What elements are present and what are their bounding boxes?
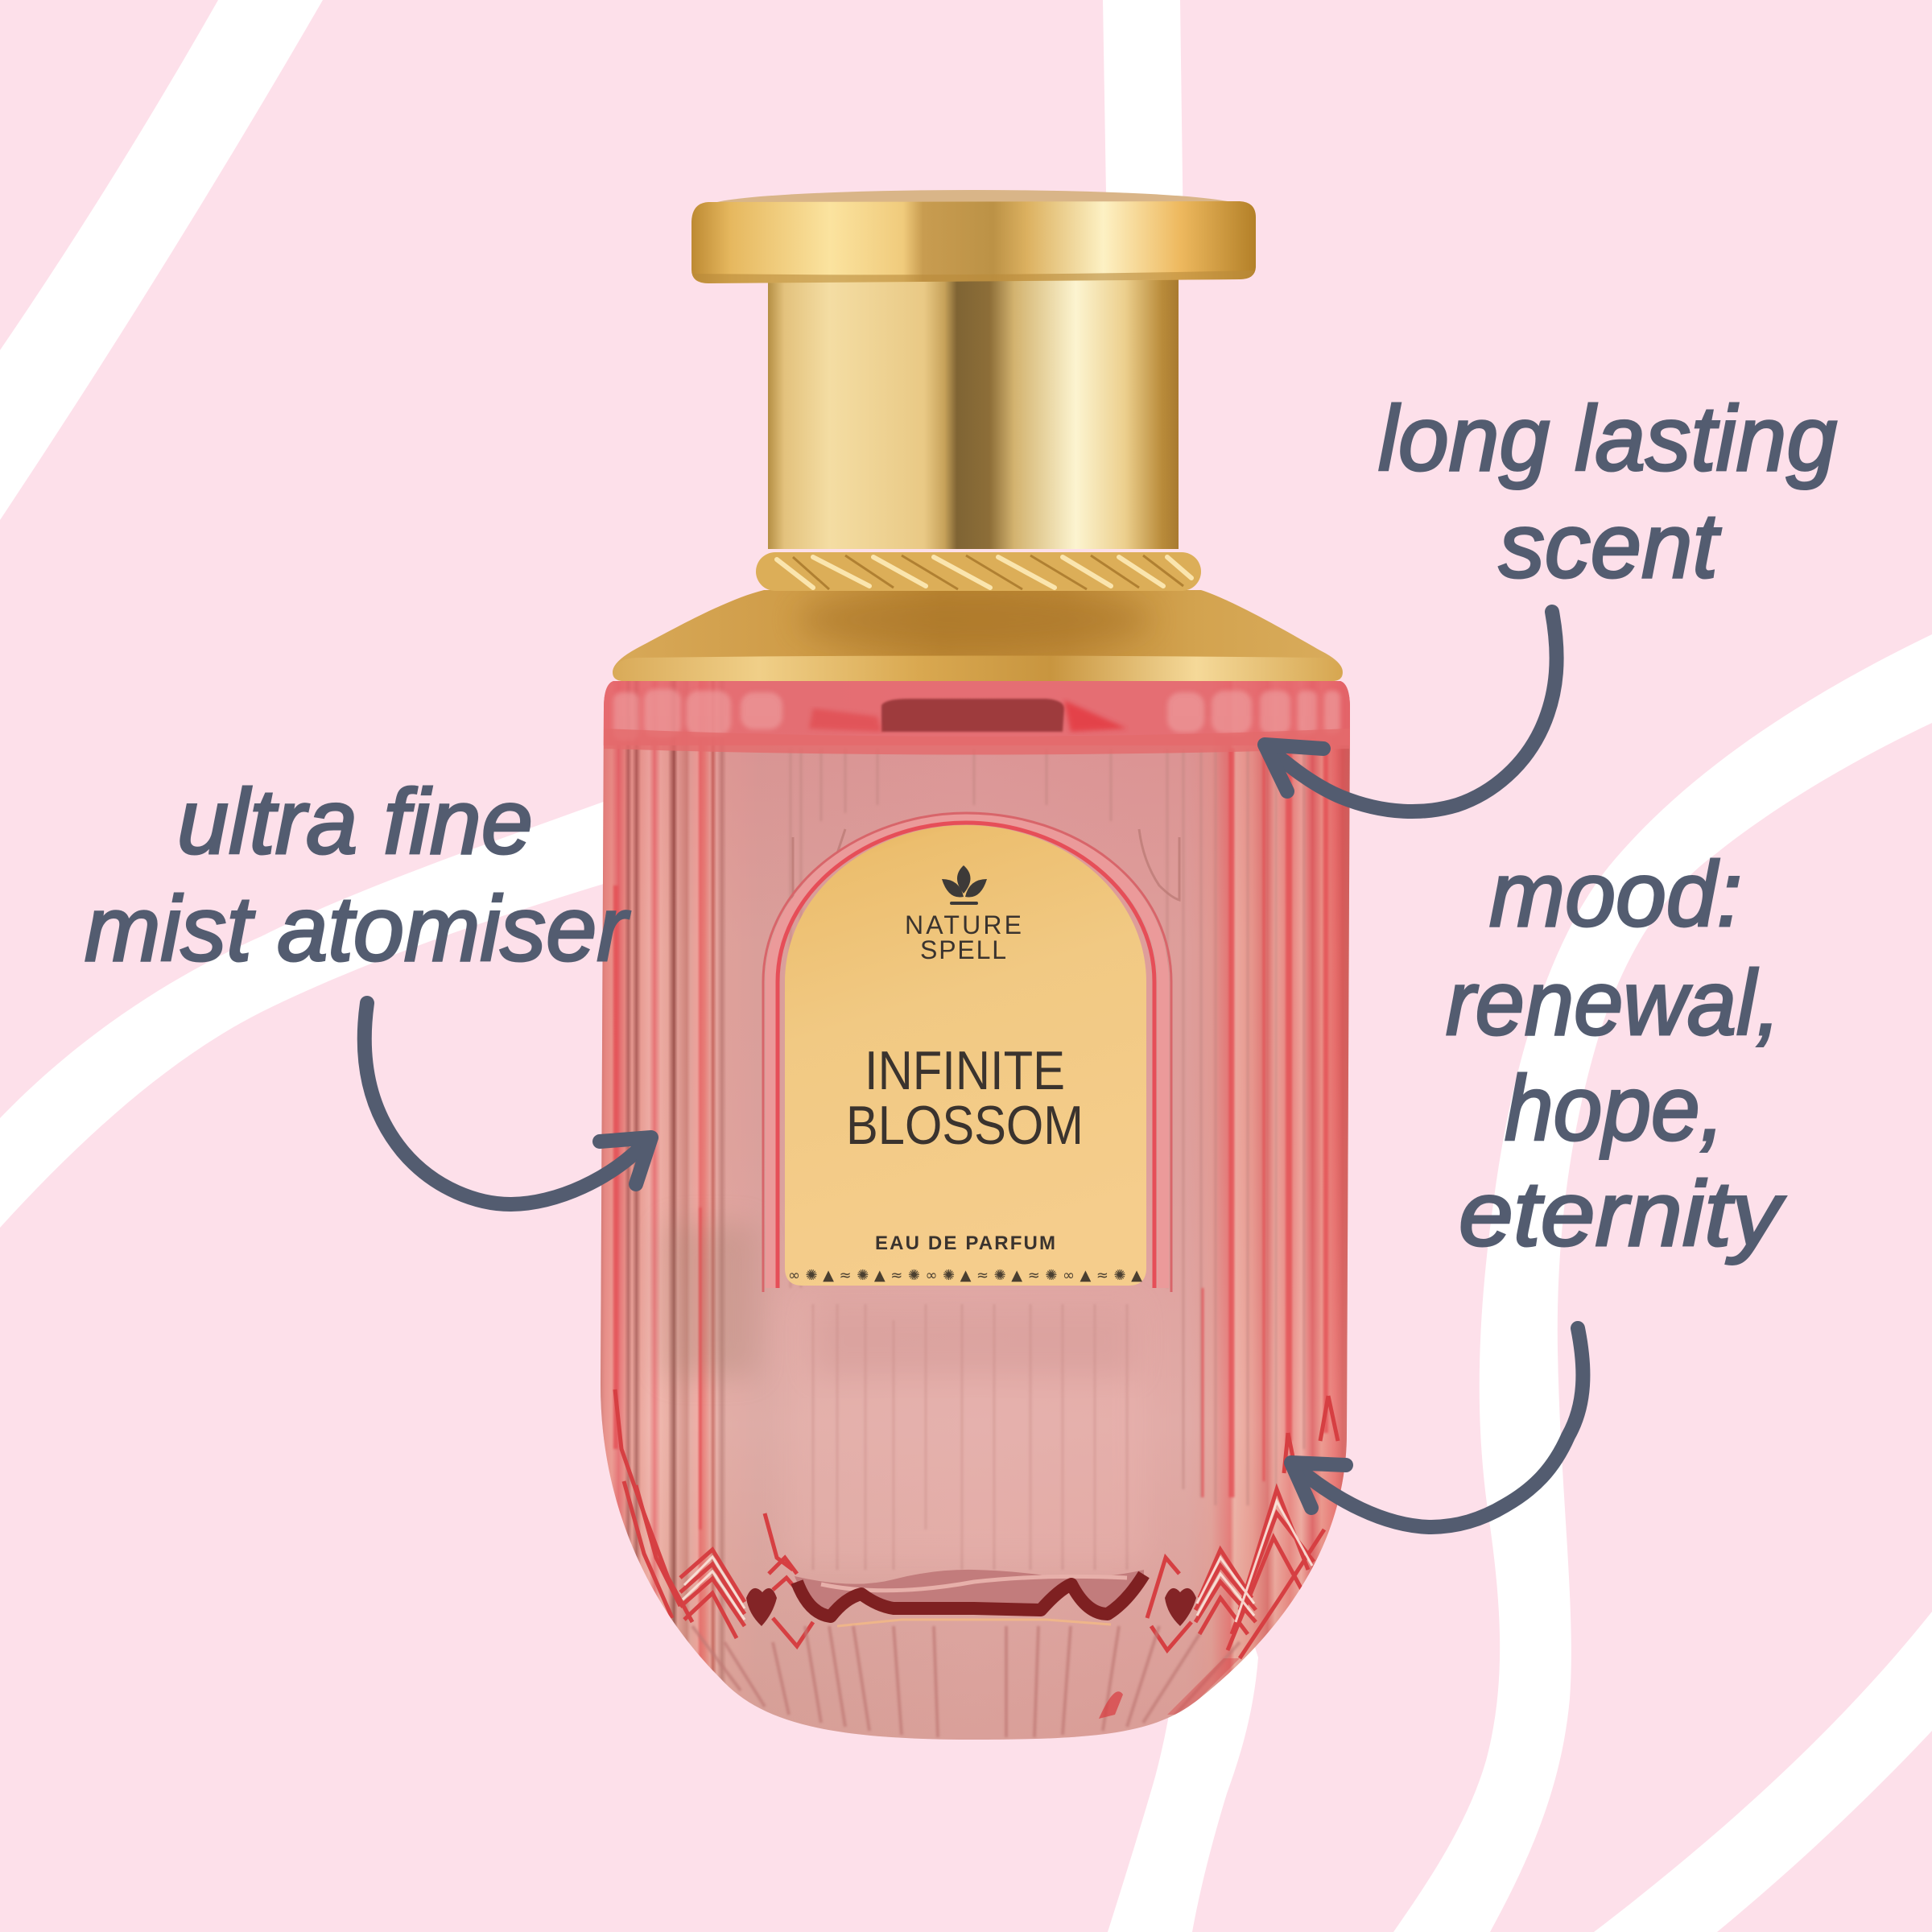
red flute highlights on the sides <box>616 749 1326 1530</box>
chevron refractions <box>615 1389 1338 1658</box>
recessed panel below label <box>811 1304 1129 1553</box>
text: ultra fine mist atomiser <box>85 771 630 980</box>
glass body <box>601 681 1350 1744</box>
perfume bottle <box>601 190 1350 1744</box>
ornament row: ∞✺▲≈✺▲≈✺∞✺▲≈✺▲≈✺∞▲≈✺▲ <box>788 1267 1142 1284</box>
arrow: to atomiser <box>365 1003 651 1204</box>
text: mood renewal hope eternity: mood: <box>1489 844 1742 946</box>
text: mood renewal hope eternity: eternity <box>1459 1163 1785 1265</box>
brand name: NATURE <box>905 910 1022 939</box>
arrow: to mood <box>1291 1328 1583 1527</box>
shoulder collar <box>613 589 1343 681</box>
text: ultra fine mist atomiser: ultra fine <box>177 771 533 873</box>
heart reflections <box>746 1588 777 1626</box>
curved grain around arch <box>793 829 1179 902</box>
icon: leaf logo <box>942 865 987 905</box>
liquid wave bottom <box>795 1570 1144 1610</box>
base fan lines <box>692 1626 1240 1737</box>
product name: INFINITE <box>865 1040 1065 1101</box>
cap <box>691 190 1256 283</box>
haze below label <box>823 1315 1123 1367</box>
neck <box>768 278 1179 549</box>
gold label: BLOSSOM <box>846 1095 1084 1156</box>
text: long lasting scent <box>1378 388 1837 597</box>
arched recess outline <box>763 813 1171 1292</box>
eau de parfum: EAU DE PARFUM <box>875 1232 1055 1254</box>
text: mood renewal hope eternity <box>1446 844 1785 1265</box>
arrow: to scent <box>1265 612 1557 811</box>
scalloped top collar <box>601 681 1350 745</box>
gold label: SPELL <box>920 935 1006 964</box>
text: ultra fine mist atomiser: mist atomiser <box>85 878 630 980</box>
brown reflection on lower left <box>664 1224 757 1377</box>
soft vertical flute lines in the centre <box>791 749 1304 1570</box>
twisted rope ring <box>756 552 1201 591</box>
text: long lasting scent: long lasting <box>1378 388 1837 490</box>
text: mood renewal hope eternity: hope, <box>1505 1058 1724 1160</box>
text: mood renewal hope eternity: renewal, <box>1446 952 1781 1055</box>
gold label <box>785 825 1146 1286</box>
text: long lasting scent: scent <box>1499 495 1721 597</box>
